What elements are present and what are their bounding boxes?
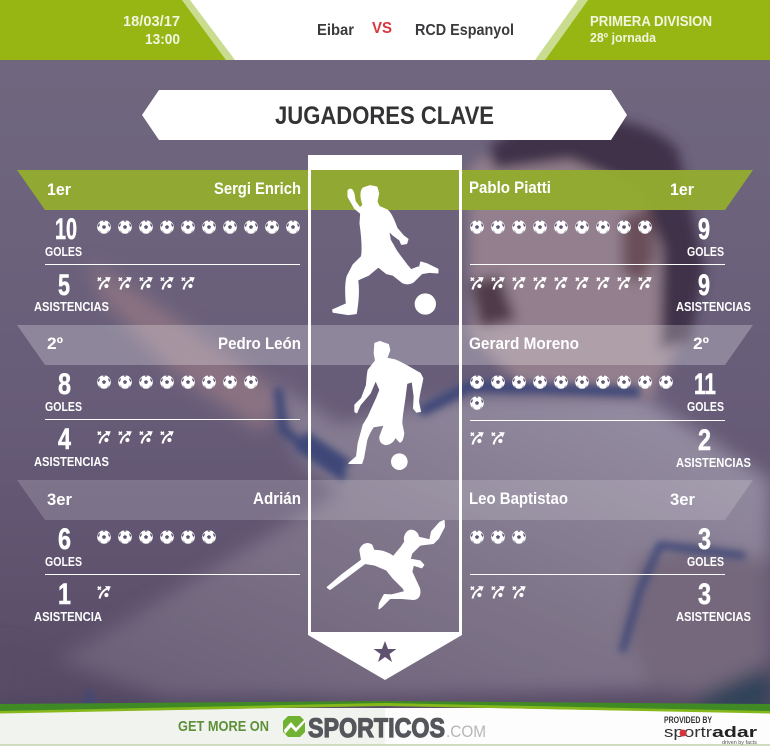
provided by sportradar: driven by facts bbox=[722, 740, 757, 746]
panel: Eibar first player: Sergi Enrich bbox=[214, 180, 301, 198]
panel: Espanyol third player bbox=[469, 490, 751, 624]
panel: Eibar third player: 6 bbox=[58, 523, 71, 556]
panel: Eibar second player: Pedro León bbox=[218, 335, 301, 353]
star icon bbox=[374, 641, 396, 662]
left green tab with date: 18/03/17 bbox=[123, 13, 180, 30]
goals icons bbox=[97, 220, 300, 234]
right green tab with competition bbox=[535, 0, 770, 60]
sporticos logo: SPORTICOS bbox=[308, 713, 445, 743]
title banner: JUGADORES CLAVE bbox=[275, 102, 494, 130]
panel: Espanyol first player: 9 bbox=[698, 269, 710, 302]
right green tab with competition: 28º jornada bbox=[590, 30, 657, 45]
left green tab with date bbox=[0, 0, 235, 60]
header band bbox=[0, 0, 770, 60]
panel: Eibar third player: 3er bbox=[47, 491, 73, 509]
assists icons bbox=[470, 277, 652, 290]
panel: Espanyol first player: 1er bbox=[670, 181, 695, 199]
goals icons bbox=[97, 375, 258, 389]
panel: Eibar third player bbox=[34, 490, 301, 624]
assists icon bbox=[97, 586, 111, 598]
title banner bbox=[142, 90, 627, 140]
silhouette: player kicking bbox=[333, 186, 438, 315]
provided by sportradar: adar bbox=[712, 724, 757, 741]
goals icons bbox=[470, 220, 652, 234]
panel: Eibar first player: 1er bbox=[47, 181, 72, 199]
assists icons bbox=[470, 586, 526, 598]
provided by sportradar: sportr bbox=[664, 724, 712, 741]
panel: Eibar first player: 5 bbox=[58, 269, 70, 302]
right green tab with competition: PRIMERA DIVISION bbox=[590, 13, 712, 30]
silhouette: player dribbling bbox=[349, 342, 423, 470]
match teams: Eibar bbox=[317, 22, 354, 39]
panel: Espanyol third player: 3er bbox=[670, 491, 696, 509]
panel: Eibar first player bbox=[34, 180, 301, 314]
panel: Espanyol third player: Leo Baptistao bbox=[469, 490, 568, 508]
assists icons bbox=[97, 277, 195, 290]
panel: Espanyol third player: ASISTENCIAS bbox=[676, 609, 751, 624]
provided by sportradar: PROVIDED BY bbox=[664, 715, 712, 725]
sporticos logo: .COM bbox=[446, 722, 486, 741]
panel: Eibar second player: ASISTENCIAS bbox=[34, 454, 109, 469]
panel: Espanyol second player: Gerard Moreno bbox=[469, 335, 579, 353]
rank bar: third place bbox=[17, 480, 753, 520]
panel: Espanyol second player: GOLES bbox=[687, 399, 724, 414]
assists icons bbox=[97, 431, 174, 444]
panel: Espanyol third player: 3 bbox=[698, 578, 711, 611]
panel: Espanyol third player: GOLES bbox=[687, 554, 724, 569]
panel: Eibar first player: GOLES bbox=[45, 244, 82, 259]
match teams: VS bbox=[372, 20, 392, 37]
panel: Eibar third player: Adrián bbox=[253, 490, 301, 508]
get more on: GET MORE ON bbox=[178, 718, 269, 735]
provided by sportradar bbox=[664, 715, 757, 746]
panel: Eibar second player: GOLES bbox=[45, 399, 82, 414]
panel: Espanyol second player bbox=[469, 335, 751, 470]
panel: Eibar second player bbox=[34, 335, 301, 469]
panel: Espanyol first player bbox=[469, 179, 751, 314]
panel: Eibar second player: 4 bbox=[58, 423, 71, 456]
rank bar: first place bbox=[17, 170, 753, 210]
goals icons bbox=[97, 530, 216, 544]
goals icons bbox=[470, 530, 526, 544]
panel: Espanyol second player: 11 bbox=[694, 368, 716, 401]
panel: Espanyol first player: ASISTENCIAS bbox=[676, 299, 751, 314]
assists icons bbox=[470, 432, 505, 444]
central column frame bbox=[308, 155, 462, 680]
match teams bbox=[317, 20, 514, 39]
panel: Eibar second player: 2º bbox=[47, 335, 63, 353]
panel: Espanyol second player: 2º bbox=[693, 335, 709, 353]
panel: Espanyol second player: 2 bbox=[698, 424, 711, 457]
goals icons bbox=[470, 375, 673, 410]
panel: Eibar third player: GOLES bbox=[45, 554, 82, 569]
panel: Espanyol third player: 3 bbox=[698, 523, 711, 556]
silhouette: players jumping bbox=[327, 521, 444, 609]
footer bbox=[0, 701, 770, 746]
panel: Eibar first player: 10 bbox=[55, 213, 77, 246]
panel: Eibar second player: 8 bbox=[58, 368, 71, 401]
panel: Espanyol first player: 9 bbox=[698, 213, 710, 246]
panel: Eibar first player: ASISTENCIAS bbox=[34, 299, 109, 314]
panel: Eibar third player: ASISTENCIA bbox=[34, 609, 103, 624]
panel: Espanyol first player: Pablo Piatti bbox=[469, 179, 551, 197]
match teams: RCD Espanyol bbox=[415, 22, 514, 39]
panel: Espanyol first player: GOLES bbox=[687, 244, 724, 259]
left green tab with date: 13:00 bbox=[145, 31, 180, 48]
panel: Eibar third player: 1 bbox=[58, 578, 71, 611]
panel: Espanyol second player: ASISTENCIAS bbox=[676, 455, 751, 470]
rank bar: second place bbox=[17, 325, 753, 365]
